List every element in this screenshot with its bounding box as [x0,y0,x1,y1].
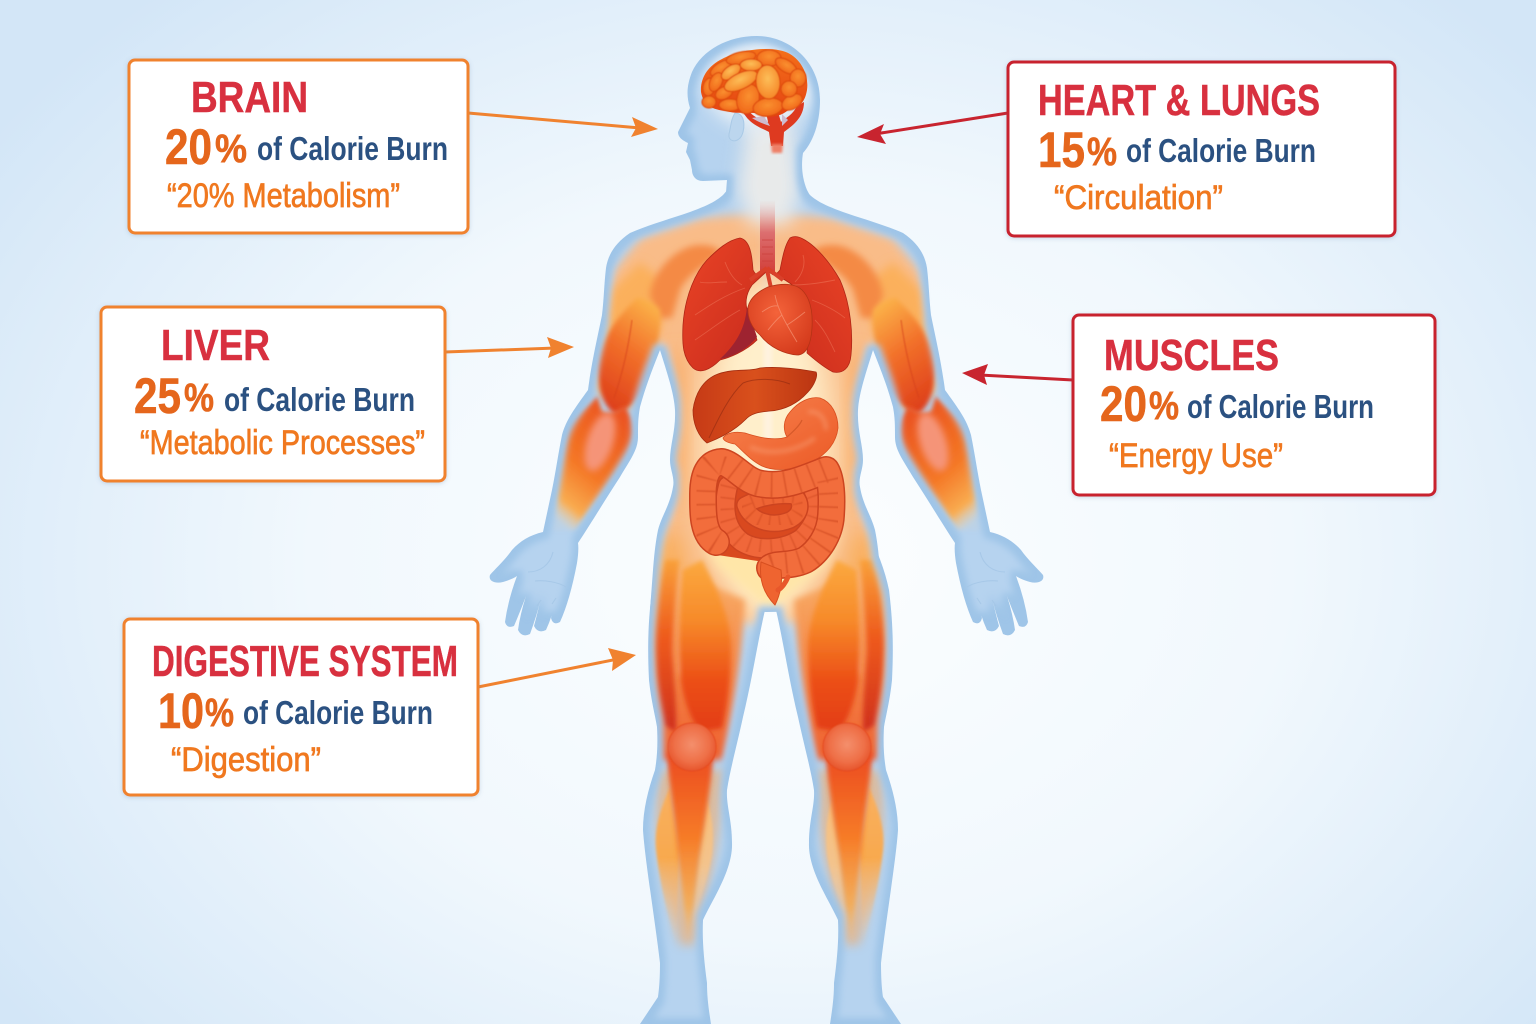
body silhouette [490,36,1043,1024]
lungs [683,237,852,372]
callout: brain: % [215,127,247,171]
stomach [723,398,838,469]
ear [729,113,744,141]
warm muscle heat map [552,41,981,945]
human body figure [490,36,1043,1024]
callout: brain: of Calorie Burn [257,130,448,167]
heart [748,284,812,355]
callout: heart and lungs: HEART & LUNGS [1038,76,1320,125]
arrow: muscles [962,364,1073,385]
callout: heart and lungs: “Circulation” [1054,179,1223,217]
body inner glow [490,36,1043,1024]
callout: muscles: MUSCLES [1104,331,1279,380]
callout: brain: 20 [165,119,212,175]
callout: muscles [962,315,1435,495]
liver [693,367,817,443]
left hand details [520,552,566,606]
lung dark lobe [720,307,757,359]
callout: digestive system: % [205,691,234,735]
lung veins [695,255,845,352]
right hand details [967,552,1013,606]
trachea [760,200,775,272]
callout: digestive system: DIGESTIVE SYSTEM [152,637,458,686]
callout: liver: of Calorie Burn [224,381,415,418]
arrow: liver [445,337,574,358]
arrow: digestive system [478,648,636,687]
callout: muscles: % [1149,384,1179,428]
callout: digestive system: of Calorie Burn [243,694,433,731]
callout: digestive system: 10 [158,683,204,739]
large intestine [703,462,831,568]
callout: brain: BRAIN [191,73,308,122]
callout: liver: “Metabolic Processes” [140,424,425,462]
callout: heart and lungs: of Calorie Burn [1126,132,1316,169]
rectum [760,562,782,605]
bronchi [750,268,783,288]
callout: heart and lungs: % [1087,130,1117,174]
callout: brain: “20% Metabolism” [167,177,400,215]
brain gyri [701,49,806,118]
callout: liver: % [184,376,214,420]
arrow: brain [468,113,658,137]
callout: heart and lungs: 15 [1038,122,1085,178]
brain [701,49,807,153]
callout: digestive system: “Digestion” [171,741,321,779]
callout: heart and lungs [857,62,1395,236]
callout: digestive system [124,619,636,795]
arrow: heart and lungs [857,113,1008,144]
callout: liver: 25 [134,368,181,424]
brain stem [743,102,804,146]
callout: liver [101,307,574,481]
brain cerebrum [701,49,807,117]
small intestine loops [725,486,817,548]
intestines [702,462,831,605]
callout: liver: LIVER [161,321,270,370]
right lung [768,237,852,372]
callout: muscles: of Calorie Burn [1187,388,1374,425]
left lung [683,238,766,371]
intestine bed [702,478,830,562]
callout: muscles: “Energy Use” [1109,437,1283,475]
callout: muscles: 20 [1100,376,1147,432]
callout: brain [129,60,658,233]
